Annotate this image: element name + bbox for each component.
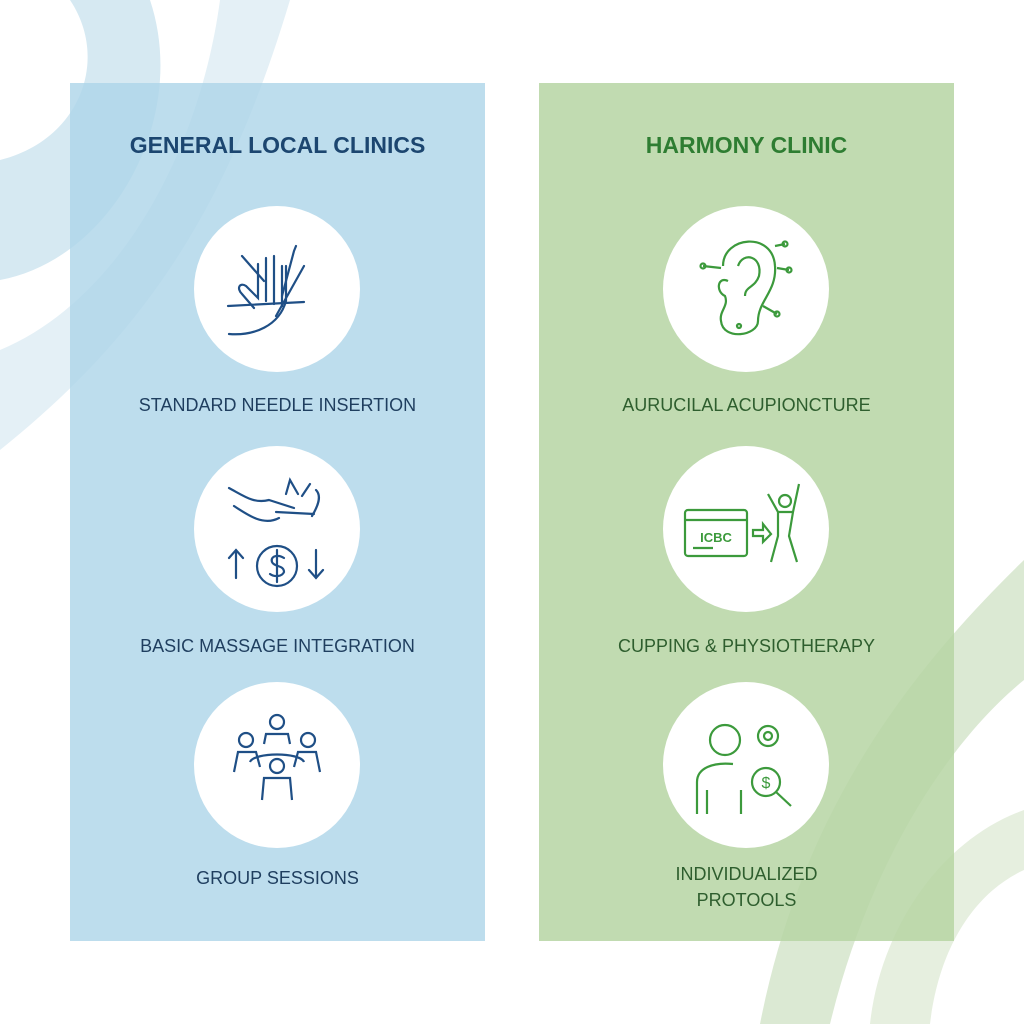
- icon: ear with needles: [663, 206, 829, 372]
- icon: ICBC card to active person: [663, 446, 829, 612]
- label: individualized protocols: [675, 864, 818, 910]
- icon: person gear magnifier: $: [762, 775, 771, 792]
- label: basic massage integration: BASIC MASSAGE INTEGRATION: [140, 636, 415, 656]
- heading: general local clinics: GENERAL LOCAL CLINICS: [130, 132, 425, 158]
- label: group sessions: GROUP SESSIONS: [196, 868, 359, 888]
- icon: massage and money: [194, 446, 360, 612]
- label: standard needle insertion: STANDARD NEEDLE INSERTION: [139, 395, 416, 415]
- label: individualized protocols: INDIVIDUALIZED: [675, 864, 818, 884]
- panel: harmony clinic: [539, 83, 954, 941]
- panel: general local clinics: [70, 83, 485, 941]
- label: individualized protocols: PROTOOLS: [697, 890, 796, 910]
- icon: group sessions: [194, 682, 360, 848]
- heading: harmony clinic: HARMONY CLINIC: [646, 132, 847, 158]
- label: cupping & physiotherapy: CUPPING & PHYSIOTHERAPY: [618, 636, 875, 656]
- label: auricular acupuncture: AURUCILAL ACUPIONCTURE: [622, 395, 871, 415]
- icon: ICBC card to active person: ICBC: [700, 530, 732, 545]
- icon: person gear magnifier: [663, 682, 829, 848]
- icon: hand with needles: [194, 206, 360, 372]
